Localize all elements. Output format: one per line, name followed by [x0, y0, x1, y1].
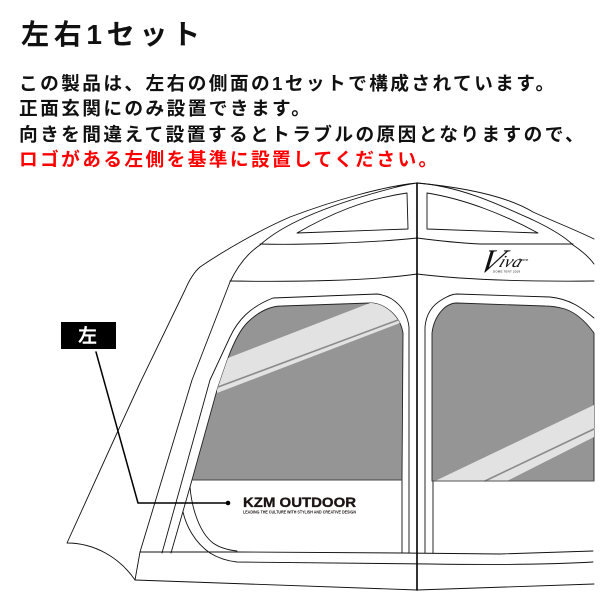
instruction line 4: red warning: ロゴがある左側を基準に設置してください。 [19, 149, 440, 170]
canopy bands [230, 238, 594, 281]
leader line from left label to logo [96, 352, 230, 505]
Viva logo: DOME TENT 2019 [493, 270, 520, 274]
Viva logo: Dome [519, 258, 528, 262]
right upper vent window [427, 193, 538, 233]
instruction line 3: 向きを間違えて設置するとトラブルの原因となりますので、 [19, 124, 586, 145]
left label: 左 [78, 325, 97, 347]
KZM OUTDOOR logo: LEADING THE CULTURE WITH STYLISH AND CREATIVE DESIGN [243, 510, 357, 514]
text block: instructions [19, 73, 586, 170]
Viva logo: iva [496, 252, 526, 271]
tent outer canopy outline [67, 183, 594, 590]
door frames [162, 294, 594, 553]
left label [61, 322, 116, 349]
instruction line 1: この製品は、左右の側面の1セットで構成されています。 [19, 73, 557, 94]
lower skirt [140, 487, 593, 564]
Viva logo: V [472, 243, 515, 279]
title: 左右1セット [21, 19, 205, 50]
left upper vent window [297, 193, 408, 233]
right door window [432, 303, 594, 481]
KZM OUTDOOR logo: KZM OUTDOOR [243, 494, 356, 510]
center seam [416, 183, 418, 590]
instruction line 2: 正面玄関にのみ設置できます。 [19, 98, 312, 119]
left door window [192, 303, 403, 480]
white panel under left window [192, 479, 402, 481]
